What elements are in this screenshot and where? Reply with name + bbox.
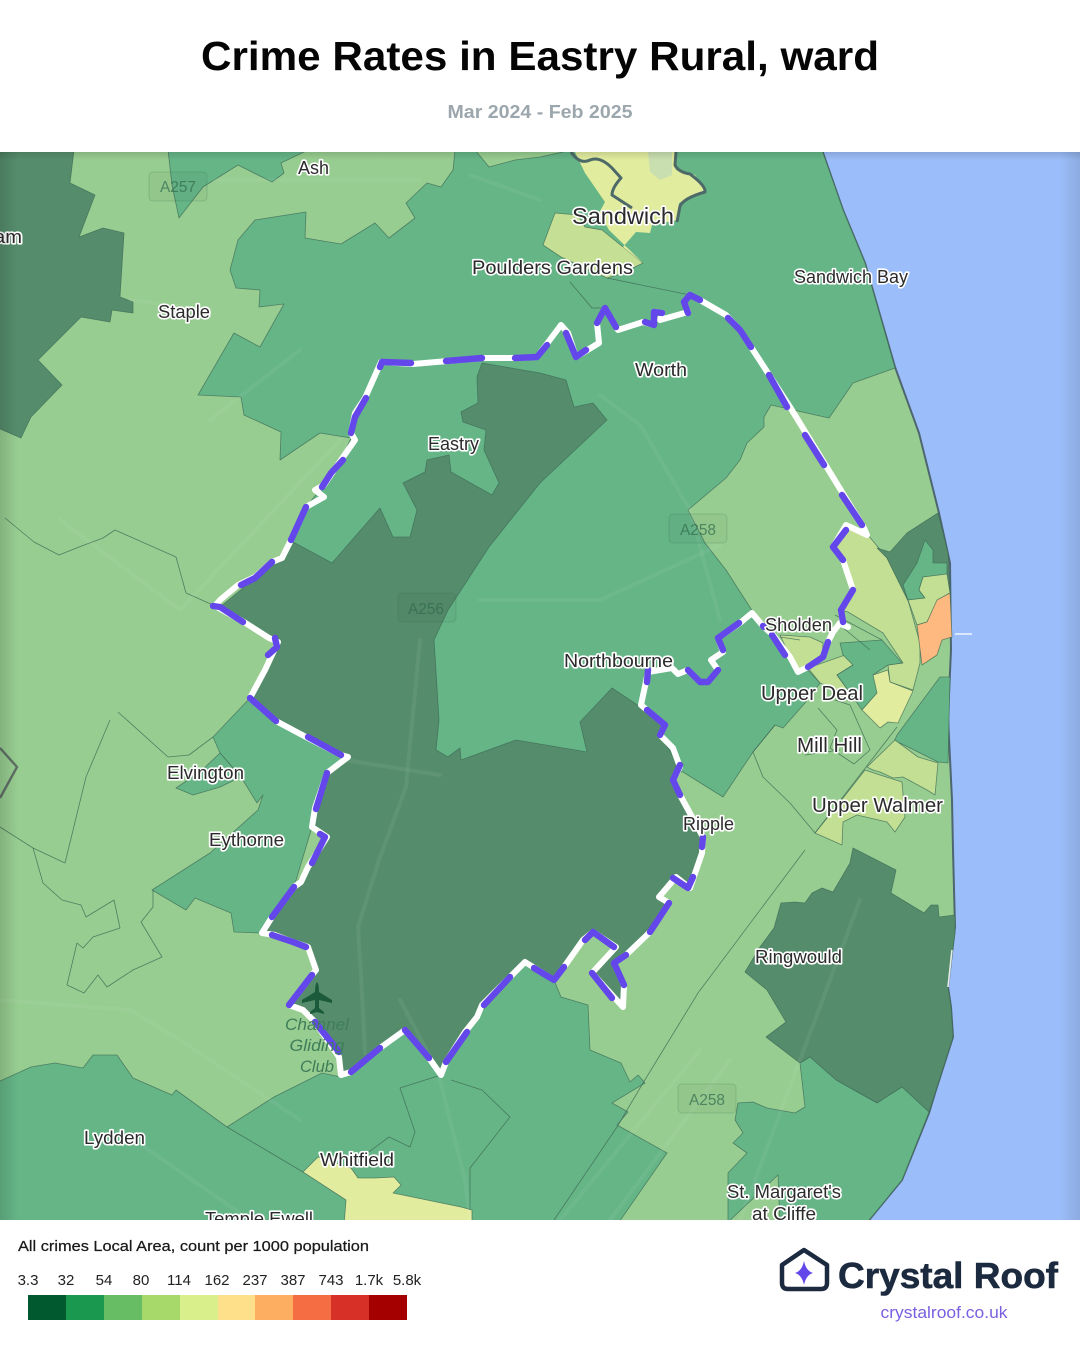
legend values: 162	[204, 1272, 230, 1289]
area: north mid green	[198, 150, 895, 797]
place labels: St. Margaret's	[727, 1182, 841, 1202]
area: mid green near A257	[168, 150, 308, 218]
map	[0, 150, 1080, 1229]
area: north Deal mid	[903, 540, 947, 600]
place labels: Lydden	[84, 1128, 145, 1148]
area: Sandwich outskirts	[543, 213, 643, 278]
place labels: Ripple	[683, 814, 734, 834]
label: Channel Gliding Club: Gliding	[290, 1036, 345, 1055]
brand url: crystalroof.co.uk	[880, 1304, 1008, 1322]
road shield: A258 south: A258	[689, 1092, 725, 1109]
legend values: 3.3	[18, 1272, 38, 1289]
boundary lines: sub-areas	[0, 278, 897, 1220]
area: Deal strip	[833, 525, 920, 690]
land base: light green areas	[0, 152, 954, 1220]
road shield: A257	[149, 172, 207, 201]
area: coast mid south of orange	[890, 677, 950, 763]
area: Upper Deal yellow	[862, 670, 913, 728]
legend values: 743	[318, 1272, 344, 1289]
legend	[18, 1238, 422, 1320]
area: Deal central mid	[837, 640, 902, 710]
map edge shading	[0, 152, 1080, 1220]
place labels: Worth	[635, 360, 687, 380]
legend values: 114	[167, 1272, 191, 1289]
place labels: Whitfield	[320, 1150, 394, 1170]
icon: airfield plane	[302, 982, 332, 1014]
ward: high-density dark area	[220, 363, 703, 1075]
area: south mid green	[0, 962, 667, 1225]
brand name: Crystal Roof	[838, 1255, 1059, 1296]
area: Sholden light patch	[780, 635, 823, 672]
road shield: A257: A257	[160, 179, 196, 196]
label: Channel Gliding Club	[285, 1015, 350, 1076]
place labels: Mill Hill	[797, 735, 862, 757]
area: Sholden lower patch	[808, 655, 853, 697]
title: Crime Rates in Eastry Rural, ward	[201, 33, 879, 79]
place labels: Elvington	[167, 763, 244, 783]
place labels: Northbourne	[564, 651, 673, 671]
subtitle: date range: Mar 2024 - Feb 2025	[448, 102, 632, 122]
river lines at Sandwich	[571, 152, 705, 222]
place labels: Ash	[298, 158, 329, 178]
area: lobe below Elvington	[176, 753, 241, 795]
legend values: 5.8k	[393, 1272, 422, 1289]
place labels: Eythorne	[209, 830, 284, 850]
ward boundary: purple dashes	[213, 295, 862, 1072]
coast details: white sliver and pier	[948, 634, 972, 987]
place labels: Sholden	[765, 615, 832, 635]
place labels: Staple	[158, 302, 210, 322]
legend values	[18, 1272, 422, 1289]
sea	[822, 150, 1080, 1225]
legend values: 237	[242, 1272, 268, 1289]
road shield: A256: A256	[408, 601, 444, 618]
area: light sliver at top	[476, 152, 564, 168]
road shield: A258 south	[678, 1084, 736, 1113]
area: St Margaret's mid green	[728, 1057, 929, 1225]
place labels: Sandwich	[572, 203, 674, 229]
place labels	[0, 158, 943, 1229]
area: light wedge at St Margaret's	[730, 1174, 780, 1220]
area: Upper Walmer	[815, 770, 905, 845]
area: Elvington and Eythorne	[152, 698, 348, 933]
area: north Deal light	[908, 574, 950, 625]
road shield: A258 north	[669, 514, 727, 543]
logo: Crystal Roof	[782, 1250, 1059, 1322]
place labels: Temple Ewell	[205, 1209, 313, 1229]
roads and faint land features	[88, 178, 862, 1210]
icon: house with star	[782, 1250, 827, 1289]
road shield: A258 north: A258	[680, 522, 716, 539]
legend values: 1.7k	[355, 1272, 384, 1289]
area: Deal orange high rate	[917, 593, 952, 665]
area: dark west	[0, 150, 133, 438]
legend values: 32	[58, 1272, 74, 1289]
ward boundary: white outline	[215, 295, 867, 1075]
area: Sandwich town	[574, 150, 705, 263]
place labels: Ringwould	[755, 947, 842, 967]
road shield: A256	[398, 593, 456, 622]
legend title: All crimes Local Area, count per 1000 population	[18, 1238, 369, 1255]
area: Walmer north	[867, 740, 938, 795]
place labels: Eastry	[428, 434, 479, 454]
legend values: 54	[96, 1272, 112, 1289]
area: north Deal dark	[877, 513, 950, 605]
label: Channel Gliding Club: Club	[300, 1057, 334, 1076]
place labels: Upper Walmer	[812, 795, 943, 817]
place labels: at Cliffe	[752, 1204, 816, 1224]
place labels: Poulders Gardens	[472, 258, 633, 279]
boundary: grey hexagon at left edge	[0, 748, 17, 798]
place labels: Sandwich Bay	[794, 267, 908, 287]
label: Channel Gliding Club: Channel	[285, 1015, 350, 1034]
legend colour scale	[28, 1295, 407, 1320]
place labels: Upper Deal	[761, 683, 863, 705]
area: Whitfield	[303, 1157, 472, 1225]
area: pale patch in Sandwich	[648, 152, 672, 180]
legend values: 80	[133, 1272, 149, 1289]
area: Ringwould dark	[745, 848, 955, 1112]
legend values: 387	[280, 1272, 306, 1289]
